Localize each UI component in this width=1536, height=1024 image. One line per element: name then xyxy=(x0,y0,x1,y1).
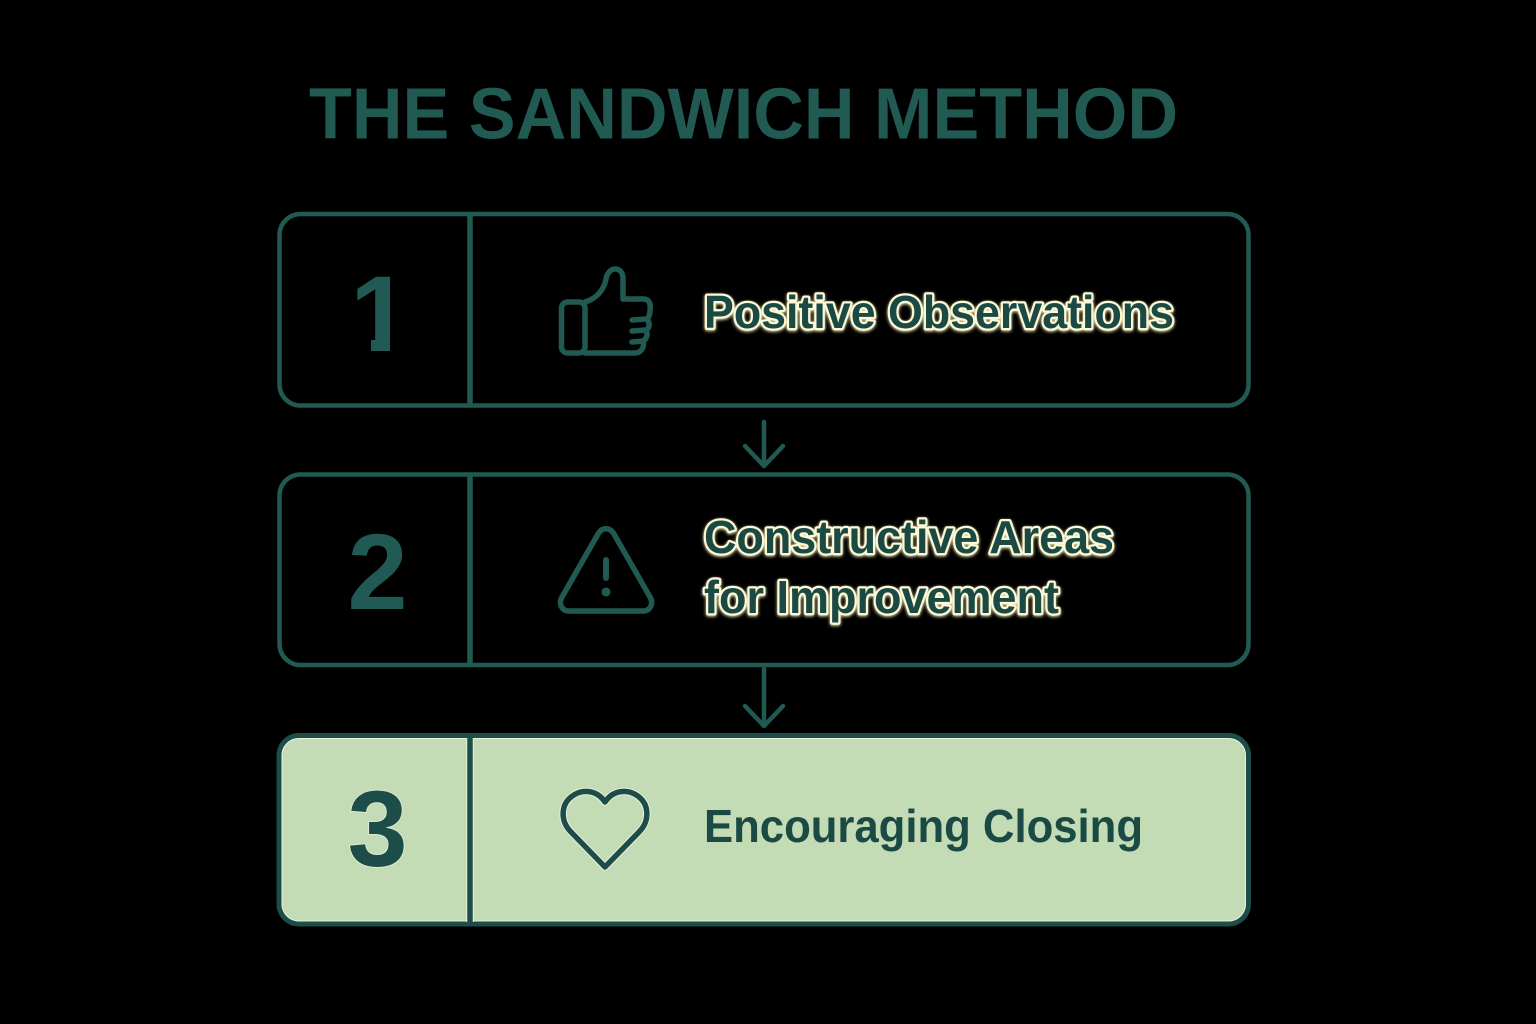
arrow: step 2 to step 3 xyxy=(745,669,783,726)
arrow: step 1 to step 2 xyxy=(745,422,783,466)
icon: heart xyxy=(563,791,647,867)
title: THE SANDWICH METHOD xyxy=(309,74,1178,154)
label: Constructive Areas for Improvement: Constructive Areas xyxy=(704,511,1114,563)
label: Encouraging Closing: Encouraging Closing xyxy=(704,800,1143,852)
number 1: 1 xyxy=(350,253,410,374)
panel: step 3 encouraging closing xyxy=(279,736,1248,924)
number 3: 3 xyxy=(347,768,408,889)
number 2: 2 xyxy=(347,511,408,632)
label: Positive Observations: Positive Observations xyxy=(704,286,1174,338)
icon: warning triangle xyxy=(560,529,652,611)
panel: step 1 positive observations xyxy=(280,214,1248,406)
label: Constructive Areas for Improvement xyxy=(704,511,1114,623)
icon: thumbs up xyxy=(562,269,650,353)
panel: step 2 constructive areas xyxy=(280,474,1248,665)
label: Constructive Areas for Improvement: for Improvement xyxy=(704,571,1059,623)
